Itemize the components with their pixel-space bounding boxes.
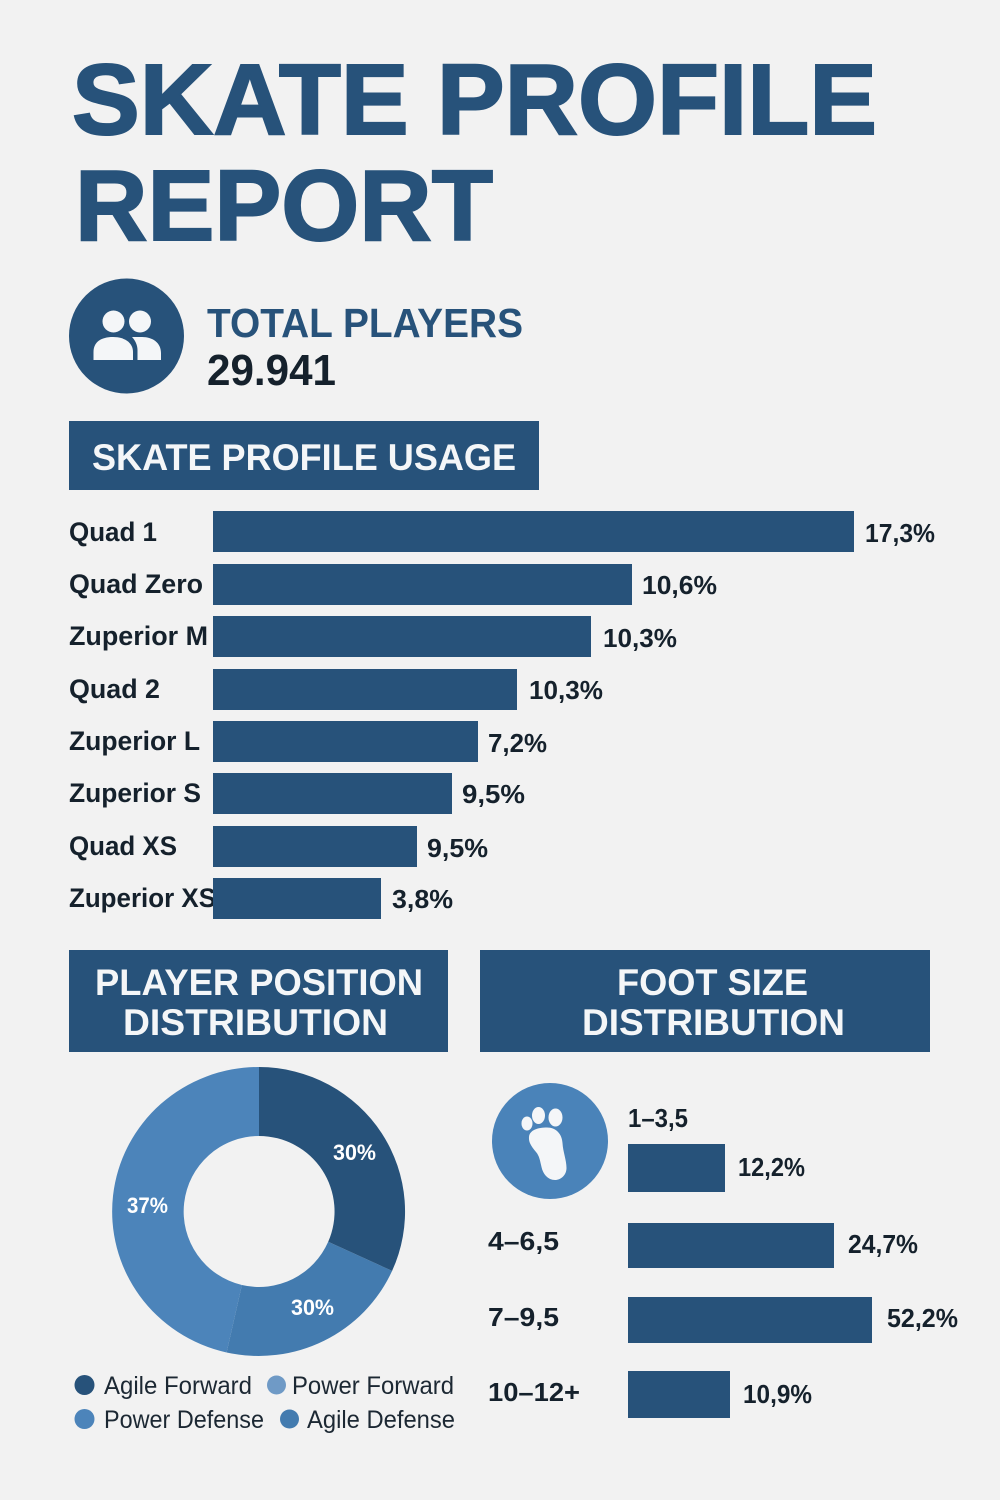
row: 7-9,5: 52,2%	[887, 1303, 958, 1333]
heading: skate profile usage	[69, 421, 539, 490]
bar chart: foot size	[488, 1103, 958, 1418]
row: 1-3,5: 1–3,5	[628, 1103, 688, 1133]
row: 4-6,5	[488, 1223, 918, 1268]
title	[72, 44, 877, 262]
icon: foot	[492, 1083, 608, 1199]
legend item: agile defense: Agile Defense	[307, 1406, 455, 1434]
row: Quad 2: Quad 2	[69, 674, 160, 704]
row: 1-3,5: 12,2%	[738, 1152, 805, 1182]
row: Zuperior L: 7,2%	[488, 728, 547, 758]
row: 4-6,5: 4–6,5	[488, 1226, 559, 1256]
heading: player position distribution: DISTRIBUTION	[123, 1002, 388, 1043]
row: Zuperior XS	[69, 878, 453, 919]
bar chart: skate profile usage	[69, 511, 935, 919]
label: 30% top: 30%	[333, 1140, 376, 1165]
row: Quad 2: 10,3%	[529, 675, 603, 705]
row: Zuperior XS: Zuperior XS	[69, 883, 216, 913]
row: Zuperior XS: 3,8%	[392, 884, 453, 914]
row: 7-9,5: 7–9,5	[488, 1302, 559, 1332]
row: Zuperior S: Zuperior S	[69, 778, 201, 808]
title: SKATE PROFILE	[72, 44, 877, 156]
row: Quad 1: 17,3%	[865, 518, 935, 548]
total players stat: 29.941	[207, 346, 336, 395]
row: 4-6,5: 24,7%	[848, 1229, 918, 1259]
row: Quad Zero	[69, 564, 717, 605]
segment: agile defense 30%	[227, 1242, 392, 1356]
row: 10-12+: 10,9%	[743, 1379, 812, 1409]
legend item: agile forward: Agile Forward	[104, 1372, 252, 1400]
row: 7-9,5	[488, 1297, 958, 1343]
row: Quad XS: Quad XS	[69, 831, 177, 861]
title: REPORT	[75, 150, 493, 262]
total players stat: TOTAL PLAYERS	[207, 300, 523, 346]
row: 1-3,5	[628, 1103, 805, 1192]
heading: player position distribution: PLAYER POSITION	[95, 962, 423, 1003]
row: Quad 2	[69, 669, 603, 710]
row: Zuperior S: 9,5%	[462, 779, 525, 809]
row: Zuperior L	[69, 721, 547, 762]
segment: power defense 37%	[112, 1067, 259, 1352]
legend item: power forward: Power Forward	[292, 1372, 454, 1400]
heading: foot size distribution	[480, 950, 930, 1052]
row: Zuperior M: Zuperior M	[69, 621, 208, 651]
row: Quad Zero: Quad Zero	[69, 569, 203, 599]
row: Quad Zero: 10,6%	[642, 570, 717, 600]
heading: foot size distribution: DISTRIBUTION	[582, 1002, 845, 1043]
heading: foot size distribution: FOOT SIZE	[617, 962, 808, 1003]
label: 30% bottom: 30%	[291, 1295, 334, 1320]
segment: agile forward 30%	[259, 1067, 405, 1271]
label: 37%: 37%	[127, 1193, 168, 1218]
row: Quad 1	[69, 511, 935, 552]
row: Zuperior S	[69, 773, 525, 814]
row: Zuperior L: Zuperior L	[69, 726, 200, 756]
legend item: power defense: Power Defense	[104, 1406, 264, 1434]
heading: skate profile usage: SKATE PROFILE USAGE	[92, 437, 516, 478]
row: 10-12+: 10–12+	[488, 1377, 580, 1407]
row: Quad 1: Quad 1	[69, 517, 157, 547]
row: Quad XS: 9,5%	[427, 833, 488, 863]
row: 10-12+	[488, 1371, 812, 1418]
row: Zuperior M	[69, 616, 677, 657]
row: Quad XS	[69, 826, 488, 867]
total players stat	[207, 300, 523, 395]
row: Zuperior M: 10,3%	[603, 623, 677, 653]
donut chart: player position	[112, 1067, 405, 1356]
legend	[74, 1372, 455, 1434]
heading: player position distribution	[69, 950, 448, 1052]
icon: players	[69, 278, 184, 394]
